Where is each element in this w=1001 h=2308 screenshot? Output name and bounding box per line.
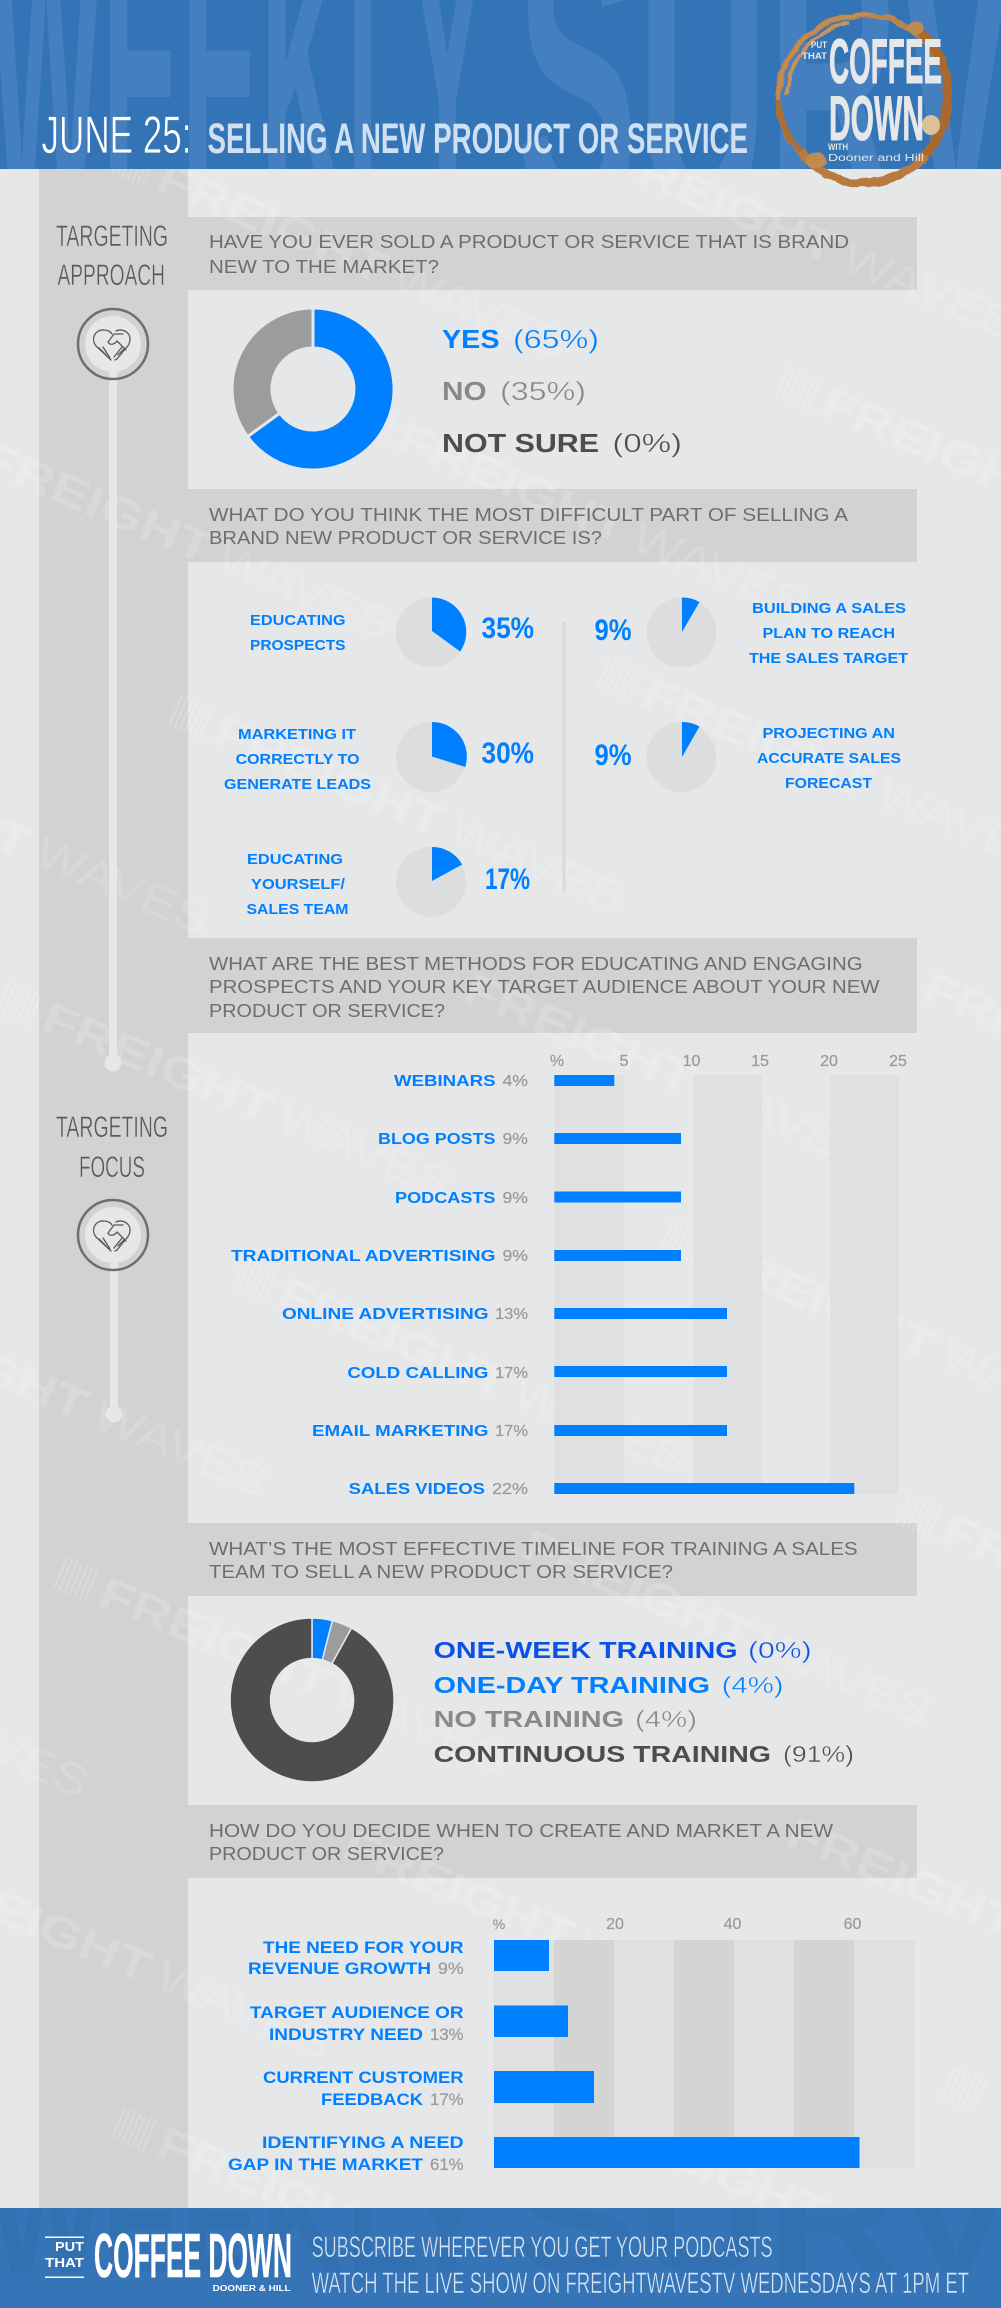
sidebar column [39,169,188,2208]
text: WAVES [28,828,217,945]
text: WAVES [625,513,814,630]
bar labels: TARGET AUDIENCE OR [250,2003,464,2022]
text: FREIGHT [457,964,702,1105]
panel: when to create [209,1820,914,2174]
text: WAVES [835,233,1001,350]
text: WAVES [442,806,631,923]
bar labels [228,1938,464,2174]
bar labels: 17% [495,1423,528,1440]
logo: coffee ring [778,15,948,183]
logo text: THAT [802,51,828,61]
bar labels: 17% [430,2090,464,2109]
legend: NO [442,376,487,406]
legend: (4%) [722,1672,784,1698]
logo text: Dooner and Hill [828,153,924,164]
heading: targeting approach [56,220,168,292]
question heading: BRAND NEW PRODUCT OR SERVICE IS? [209,527,602,548]
legend: ONE-DAY TRAINING [434,1672,710,1698]
bar labels: SALES VIDEOS [349,1481,485,1498]
icon: handshake heart [78,1200,148,1270]
legend: (65%) [513,324,599,354]
text: WAVES [750,1620,939,1737]
footer banner [0,2208,1001,2308]
axis labels: 20 [820,1053,838,1070]
bar labels: PODCASTS [395,1190,496,1207]
text: WAVES [270,1093,459,1210]
item: projecting a forecast 9%: FORECAST [785,775,872,792]
legend: (35%) [500,376,586,406]
logo text: WITH [828,142,848,152]
bar chart: decision drivers [228,1916,914,2174]
bar labels: BLOG POSTS [378,1131,496,1148]
legend: CONTINUOUS TRAINING [434,1741,771,1767]
bar labels: 13% [430,2025,464,2044]
icon: handshake heart [78,309,148,379]
timeline line [104,370,122,1072]
heading: targeting approach: APPROACH [58,259,165,292]
item: projecting a forecast 9%: ACCURATE SALES [757,750,901,767]
legend [434,1637,854,1767]
text: FREIGHT [207,706,452,847]
item: marketing it 30%: MARKETING IT [238,726,356,743]
item: building a sales plan 9%: BUILDING A SALES [752,600,906,617]
donut chart [232,308,394,470]
legend [442,324,682,458]
bar labels: THE NEED FOR YOUR [263,1938,464,1957]
item: educating yourself 17%: 17% [485,863,530,896]
question heading [209,1820,834,1864]
item: marketing it 30% [224,722,534,793]
bar labels: COLD CALLING [347,1365,488,1382]
item: educating prospects 35% [250,598,534,668]
legend: (0%) [748,1637,812,1663]
text: FREIGHT [390,413,635,554]
footer logo: PUT [55,2239,84,2254]
footer banner: WEEKLY [0,2136,487,2304]
item: educating prospects 35%: 35% [482,612,534,645]
question heading: HAVE YOU EVER SOLD A PRODUCT OR SERVICE THAT IS BRAND [209,231,849,252]
legend: ONE-WEEK TRAINING [434,1637,738,1663]
heading: targeting focus: TARGETING [56,1111,168,1144]
bar labels [231,1073,528,1498]
text: WAVES [571,1920,760,2037]
panel: training timeline [209,1538,858,1782]
item: projecting a forecast 9% [594,722,901,792]
item: projecting a forecast 9%: PROJECTING AN [762,725,895,742]
bar labels: WEBINARS [394,1073,496,1090]
panel: most difficult part [209,504,908,918]
bar labels: 61% [430,2155,464,2174]
bar labels: CURRENT CUSTOMER [263,2068,464,2087]
legend: (0%) [612,428,682,458]
question heading [209,953,880,1021]
item: educating prospects 35%: PROSPECTS [250,637,346,654]
question heading [209,1538,858,1582]
text: FREIGHT [336,1820,581,1961]
bar labels: IDENTIFYING A NEED [262,2133,464,2152]
footer banner: COFFEE DOWN [94,2222,292,2291]
item: marketing it 30%: GENERATE LEADS [224,776,371,793]
text: WAVES [506,1368,695,1485]
question heading: NEW TO THE MARKET? [209,256,439,277]
donut chart [230,1618,394,1782]
question heading [209,504,849,548]
text: WAVES [327,1668,516,1785]
bar labels: 9% [438,1959,464,1978]
question heading [209,231,849,277]
panel: brand new to market [209,231,849,470]
text: FREIGHT [635,668,880,809]
question heading: HOW DO YOU DECIDE WHEN TO CREATE AND MARKET A NEW [209,1820,834,1841]
sidebar section: targeting focus [56,1111,168,1422]
text: WAVES [692,1064,881,1181]
panel: best methods [209,953,907,1498]
text: FREIGHT [515,1520,760,1661]
bar labels: EMAIL MARKETING [312,1423,488,1440]
text: FREIGHT [780,1808,1001,1949]
logo text: PUT [811,40,827,50]
item: projecting a forecast 9%: 9% [594,739,632,772]
bar labels: 13% [495,1306,528,1323]
question heading: PRODUCT OR SERVICE? [209,1000,445,1021]
text: FREIGHT [35,993,280,1134]
footer call to action [312,2231,969,2300]
bar labels: 22% [492,1481,528,1498]
question heading: WHAT DO YOU THINK THE MOST DIFFICULT PART OF SELLING A [209,504,849,525]
text: FREIGHT [698,1230,943,1371]
bar labels: 9% [502,1248,528,1265]
sidebar section: targeting approach [56,220,168,1072]
footer logo [45,2222,292,2293]
text: WAVES [86,1390,275,1507]
item: educating yourself 17% [246,847,530,918]
legend: (4%) [635,1706,697,1732]
item: marketing it 30%: CORRECTLY TO [236,751,360,768]
bar chart: methods [231,1053,907,1498]
axis labels: % [493,1916,505,1932]
text: FREIGHT [271,1268,516,1409]
item: building a sales plan 9%: THE SALES TARGET [749,650,908,667]
legend: NOT SURE [442,428,599,458]
bars [494,1940,860,2168]
legend: (91%) [783,1741,854,1767]
question heading: WHAT’S THE MOST EFFECTIVE TIMELINE FOR TRAINING A SALES [209,1538,858,1559]
timeline line [106,1261,122,1422]
bar labels: 17% [495,1365,528,1382]
bars [554,1075,854,1494]
heading: targeting approach: TARGETING [56,220,168,253]
axis labels: 40 [724,1916,742,1933]
text: FREIGHT [92,1568,337,1709]
item: building a sales plan 9% [594,597,908,668]
bar labels: 9% [502,1190,528,1207]
axis labels: 25 [889,1053,907,1070]
heading: targeting focus: FOCUS [79,1151,145,1184]
question heading: PROSPECTS AND YOUR KEY TARGET AUDIENCE ABOUT YOUR NEW [209,976,880,997]
bar labels: FEEDBACK [321,2090,424,2109]
header banner [0,0,1001,169]
bar labels: REVENUE GROWTH [248,1959,431,1978]
footer logo: THAT [45,2255,84,2270]
item: marketing it 30%: 30% [482,737,534,770]
text: WAVES [385,253,574,370]
item: educating prospects 35%: EDUCATING [250,612,346,629]
item: building a sales plan 9%: PLAN TO REACH [762,625,895,642]
axis labels [550,1053,907,1070]
text: FREIGHT [150,153,395,294]
footer logo: DOONER & HILL [213,2284,291,2293]
legend: NO TRAINING [434,1706,624,1732]
bar labels: 9% [502,1131,528,1148]
bar labels: TRADITIONAL ADVERTISING [231,1248,496,1265]
item: educating yourself 17%: SALES TEAM [246,901,348,918]
text: WAVES [149,1952,338,2069]
axis labels: 60 [844,1916,862,1933]
item: educating yourself 17%: EDUCATING [247,851,343,868]
axis labels [493,1916,862,1933]
item: educating yourself 17%: YOURSELF/ [251,876,346,893]
bar labels: GAP IN THE MARKET [228,2155,424,2174]
heading: targeting focus [56,1111,168,1184]
title date: JUNE 25: [42,106,192,165]
bar labels: INDUSTRY NEED [269,2025,423,2044]
text: FREIGHT [600,133,845,274]
question heading: TEAM TO SELL A NEW PRODUCT OR SERVICE? [209,1561,673,1582]
axis labels: 5 [620,1053,629,1070]
question heading: WHAT ARE THE BEST METHODS FOR EDUCATING AND ENGAGING [209,953,863,974]
bar labels: ONLINE ADVERTISING [282,1306,488,1323]
axis labels: 10 [683,1053,700,1070]
axis labels: 15 [751,1053,769,1070]
text: FREIGHT [590,2098,835,2239]
axis labels: 20 [606,1916,624,1933]
question heading: PRODUCT OR SERVICE? [209,1843,444,1864]
text: WAVES [210,533,399,650]
axis labels: % [550,1053,564,1070]
text: FREIGHT [150,2118,395,2259]
bar labels: 4% [502,1073,528,1090]
legend: YES [442,324,500,354]
logo text [802,27,942,164]
item: building a sales plan 9%: 9% [594,614,632,647]
